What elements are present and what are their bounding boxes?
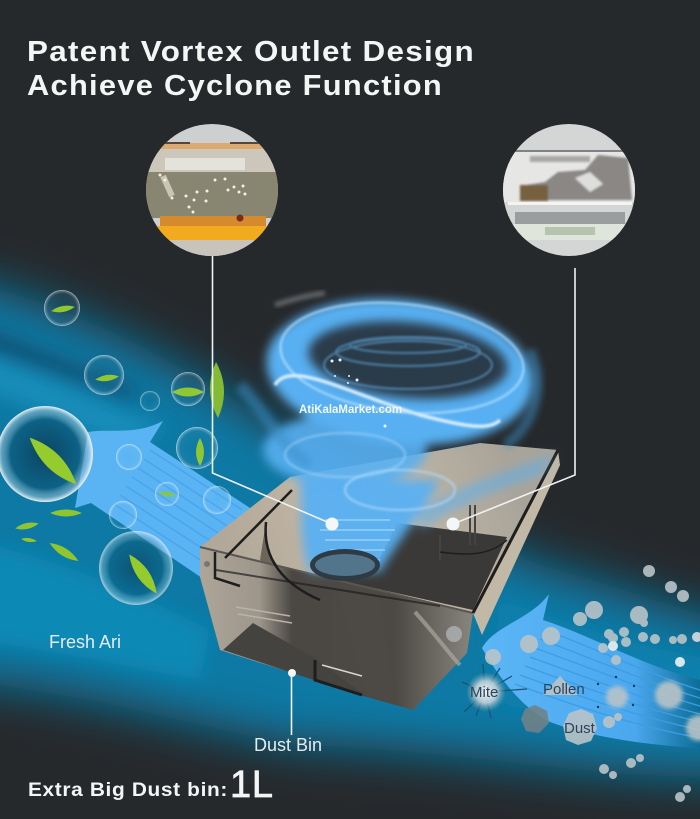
watermark: AtiKalaMarket.com <box>299 402 402 416</box>
particle labels: Dust <box>564 720 596 737</box>
pointer dots <box>288 518 460 677</box>
bin interior <box>337 523 507 610</box>
photo: bin with dust <box>503 124 635 256</box>
photo: bin with mites <box>146 124 278 256</box>
leaves <box>15 304 225 564</box>
label: dust bin: Dust Bin <box>254 735 322 755</box>
blue arrow: dirty air <box>482 594 700 748</box>
bin front face <box>200 547 473 710</box>
title: Patent Vortex Outlet Design <box>27 36 475 68</box>
bin rim lines <box>200 450 558 695</box>
title: Achieve Cyclone Function <box>27 70 443 102</box>
vortex body <box>259 286 555 572</box>
blue air stream glow <box>0 275 700 777</box>
bin shadow floor <box>223 623 367 697</box>
blue vortex <box>240 286 555 581</box>
particle labels <box>470 681 596 737</box>
particle labels: Pollen <box>543 681 585 698</box>
dust bin <box>200 443 560 710</box>
pointer lines <box>212 256 575 735</box>
vortex eye <box>305 313 511 407</box>
blue arrow: fresh air <box>75 421 250 580</box>
dust particles <box>485 565 700 802</box>
bin outer strip <box>473 450 560 635</box>
label: fresh air: Fresh Ari <box>49 632 121 652</box>
bubbles <box>0 290 231 605</box>
title <box>27 36 475 102</box>
capacity caption <box>28 764 273 806</box>
mite burst <box>462 664 527 718</box>
particle labels: Mite <box>470 684 498 701</box>
bin top surface <box>200 443 558 613</box>
capacity caption: Extra Big Dust bin: <box>28 779 228 801</box>
capacity caption: 1L <box>230 764 273 806</box>
